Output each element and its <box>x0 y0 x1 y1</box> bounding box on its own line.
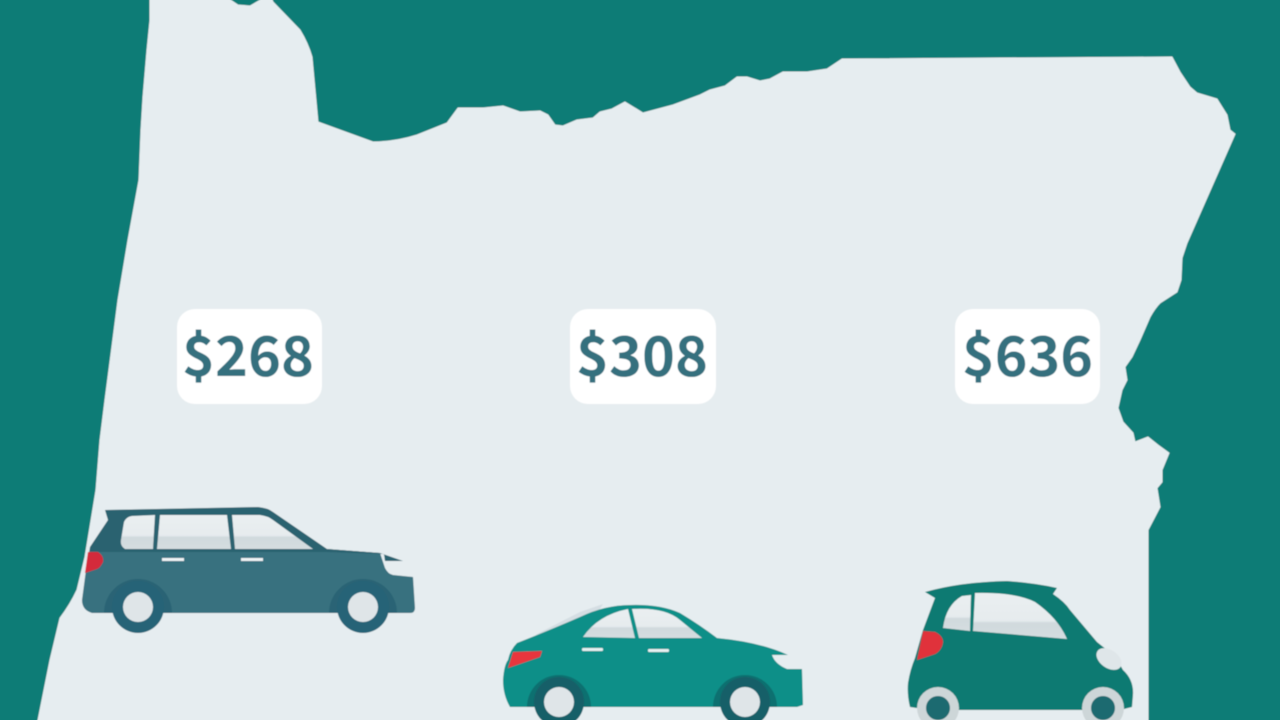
compact wheels <box>917 687 1124 720</box>
sedan wheels <box>527 675 777 720</box>
sedan door handles <box>582 648 669 652</box>
car: compact <box>908 581 1133 720</box>
car: SUV <box>82 507 415 633</box>
price label: $636: $636 <box>962 312 1093 392</box>
price label: $308: $308 <box>576 312 708 392</box>
SUV door handles <box>162 558 263 561</box>
compact headlight <box>1092 644 1126 674</box>
compact tail light <box>917 631 943 660</box>
SUV wheels <box>104 579 397 633</box>
car: sedan <box>503 604 803 720</box>
sedan windows <box>583 609 702 638</box>
SUV tail light <box>85 552 103 573</box>
sedan tail light <box>508 651 542 668</box>
price label: $268: $268 <box>182 312 314 392</box>
SUV windows <box>121 515 313 549</box>
compact windows <box>943 593 1067 639</box>
